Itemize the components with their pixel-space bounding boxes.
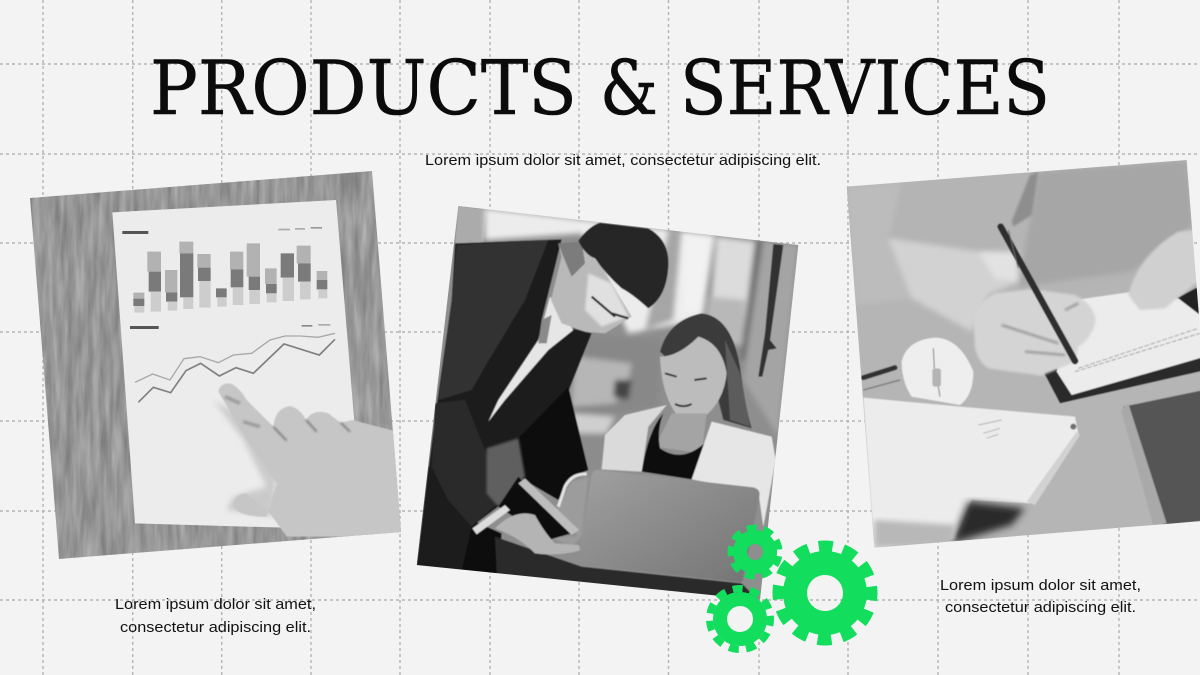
bottom small gear (706, 585, 774, 653)
top small gear (727, 524, 783, 580)
woman (602, 313, 776, 527)
tablet (1123, 385, 1200, 525)
left caption (115, 596, 316, 636)
man (417, 223, 668, 577)
line chart (135, 333, 335, 402)
table (495, 537, 762, 603)
laptop (578, 470, 760, 582)
right caption: Lorem ipsum dolor sit amet, (940, 577, 1141, 594)
icon: green gears (706, 524, 878, 653)
left hand on notebook (1128, 230, 1200, 310)
man's hands and phone (472, 474, 588, 554)
subtitle text: Lorem ipsum dolor sit amet, consectetur adipiscing elit. (425, 152, 821, 169)
notebook on clipboard (1043, 287, 1200, 403)
pen (1001, 227, 1075, 361)
black top (642, 413, 704, 479)
hair (578, 223, 668, 308)
desk and background (845, 155, 1200, 555)
neck (655, 413, 707, 453)
chart headings (122, 227, 330, 329)
title: PRODUCTS (150, 44, 577, 132)
right caption (940, 577, 1141, 616)
left caption: consectetur adipiscing elit. (120, 619, 311, 636)
blurred foreground hand (952, 502, 1025, 543)
stacked bar chart (133, 242, 327, 313)
mouse (902, 338, 973, 405)
blazer (602, 405, 667, 472)
desk pens (863, 368, 895, 378)
closed book (863, 398, 1078, 548)
paper sheet (112, 200, 363, 530)
office background (415, 200, 815, 600)
neck and face (551, 243, 632, 333)
shirt (488, 297, 573, 422)
title (150, 44, 1050, 132)
large gear (772, 540, 878, 646)
photo: man and woman at laptop (415, 200, 815, 603)
left caption: Lorem ipsum dolor sit amet, (115, 596, 316, 613)
chair by man (487, 438, 525, 507)
title: & (600, 44, 658, 132)
photo: person writing in notebook (845, 155, 1200, 555)
photo: chart on paper with pointing hand (27, 167, 407, 563)
hand (213, 384, 403, 537)
writing hand (973, 289, 1096, 376)
face (660, 337, 727, 422)
wood table (27, 167, 407, 563)
title: SERVICES (680, 44, 1050, 132)
right caption: consectetur adipiscing elit. (945, 599, 1136, 616)
